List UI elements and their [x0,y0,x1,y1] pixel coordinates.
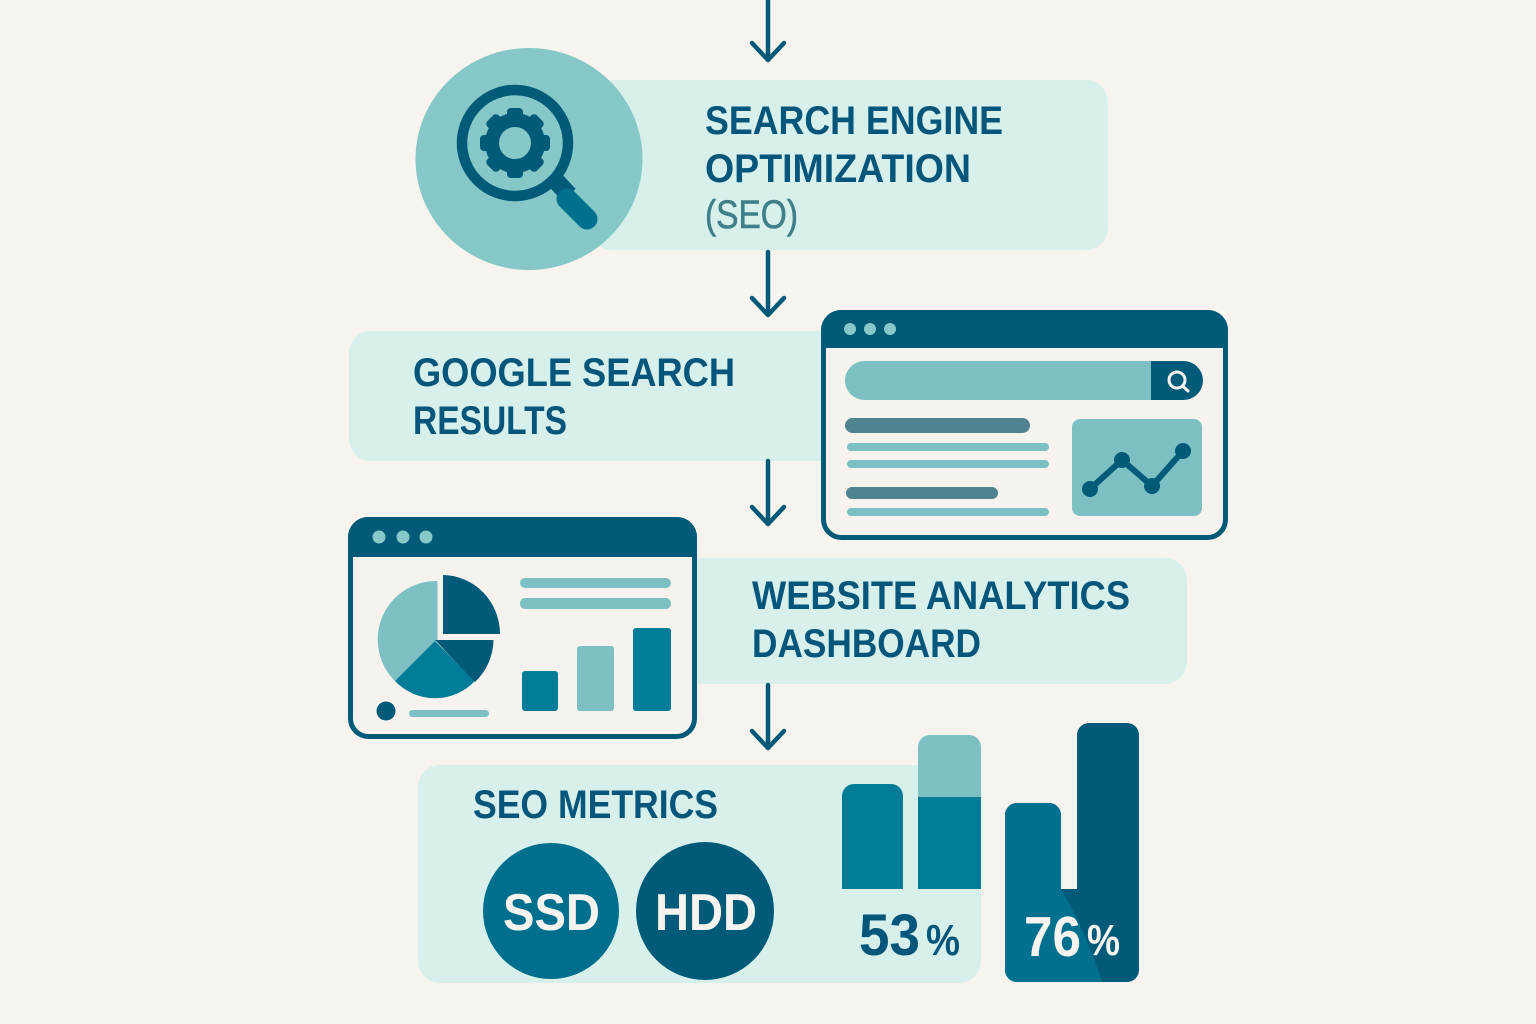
browser window: search results page [821,310,1228,538]
panel background [680,558,1187,684]
panel background [590,80,1108,250]
panel: website analytics dashboard [680,558,1187,684]
browser title bar [821,310,1228,348]
arrow: analytics to metrics [752,685,784,748]
block: dark shape [1005,723,1139,982]
arrow: SEO to search results [752,252,784,315]
legend [376,702,489,720]
window dots [372,530,432,544]
heading: dashboard: DASHBOARD [752,622,981,666]
badge: HDD: HDD [655,884,757,942]
bar chart [522,628,671,711]
search button [1151,361,1203,400]
heading abbreviation: (SEO) [705,193,798,237]
line chart [1072,419,1202,516]
browser window: analytics dashboard [348,517,697,736]
stat: 76 percent: 76 [1024,905,1081,969]
heading: website analytics: WEBSITE ANALYTICS [752,574,1130,618]
stat block: 76 percent [1005,723,1139,982]
badge: SSD: SSD [503,884,600,942]
arrow: into SEO [752,0,784,60]
stat: 76 percent [1024,905,1120,969]
window dots [844,323,896,335]
heading: SEO metrics: SEO METRICS [473,783,718,827]
panel background [418,765,981,983]
search bar [845,361,1151,400]
stat: 53 percent: % [926,916,960,965]
bar: left [842,784,903,889]
panel: search engine optimization [416,48,1108,270]
panel: google search results [349,331,839,461]
heading line two: OPTIMIZATION [705,147,971,191]
badge: SSD [483,843,619,979]
heading: results: RESULTS [413,399,567,443]
bar: stacked [918,735,981,889]
panel: SEO metrics [418,735,981,983]
heading: google search: GOOGLE SEARCH [413,351,735,395]
stat: 76 percent: % [1087,916,1120,965]
browser title bar [348,517,697,557]
arrow: search results to analytics [752,461,784,524]
badge: HDD [636,842,774,980]
search result list [845,418,1049,516]
text lines [520,578,671,609]
block: lighter overlay [1005,803,1102,982]
panel background [349,331,839,461]
pie chart [378,575,500,698]
icon: circle badge [416,48,642,270]
stat: 53 percent [859,903,960,968]
heading: search engine optimization: SEARCH ENGINE [705,99,1003,143]
icon: magnifier with gear [462,90,587,219]
stat: 53 percent: 53 [859,903,920,968]
